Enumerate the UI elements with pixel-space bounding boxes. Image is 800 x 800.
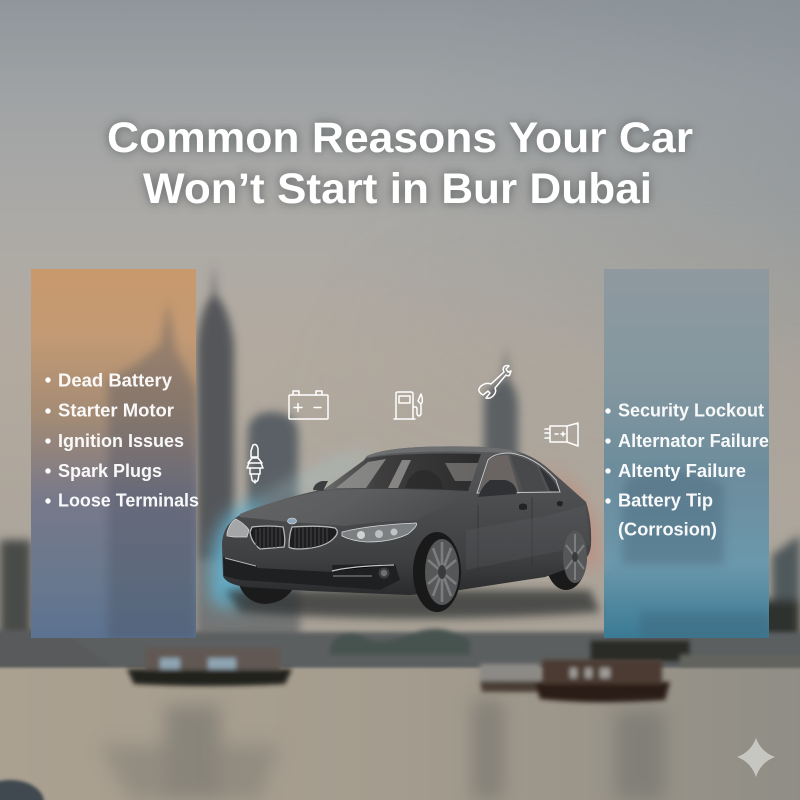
roof: [367, 446, 522, 458]
icon: sparkle watermark: [737, 738, 775, 777]
list: right causes: Security Lockout: [618, 400, 764, 420]
icon: fuel pump: [394, 392, 422, 419]
icon: car battery: [289, 391, 328, 419]
side windows: [478, 455, 520, 494]
panel: right list: [604, 269, 770, 640]
kidney grille: [250, 526, 337, 549]
rear tyre: [545, 524, 587, 590]
list: left causes: Ignition Issues: [58, 430, 184, 451]
list: right causes: Altenty Failure: [618, 460, 746, 481]
front wheel: [413, 532, 461, 612]
ground shadow: [225, 590, 600, 618]
badge: [288, 518, 296, 524]
title: Common Reasons Your Car: [107, 115, 693, 162]
mirror: [478, 480, 517, 497]
list: left causes: Dead Battery: [58, 370, 173, 390]
boats: [127, 648, 670, 702]
far front wheel: [238, 582, 294, 604]
water reflections: [100, 700, 665, 800]
icon: wrench: [479, 366, 511, 398]
list: left causes: Spark Plugs: [58, 460, 162, 481]
title: [107, 115, 693, 213]
list: left causes: [45, 370, 199, 510]
icon: spark plug: [247, 444, 263, 483]
left headlight: [227, 519, 249, 537]
windshield: [323, 454, 481, 491]
list: right causes: Alternator Failure: [618, 430, 769, 451]
title: Common Reasons Your Car: [107, 115, 693, 162]
water: [0, 668, 800, 800]
car: [222, 446, 600, 618]
icon: starter motor: [545, 423, 578, 446]
door handles and seams: [519, 501, 563, 510]
list: right causes: Battery Tip: [618, 490, 713, 510]
title: Won’t Start in Bur Dubai: [143, 166, 652, 213]
right headlight: [342, 523, 417, 542]
list: right causes: (Corrosion): [618, 518, 717, 540]
hood: [240, 489, 478, 526]
body: [222, 446, 591, 595]
list: left causes: Starter Motor: [58, 400, 174, 420]
far shore: [0, 629, 800, 692]
list: left causes: Loose Terminals: [58, 490, 199, 510]
rear wheel: [563, 531, 587, 583]
car glow: [210, 450, 596, 608]
panel: left list: [31, 269, 199, 640]
title: Won’t Start in Bur Dubai: [143, 166, 652, 213]
list: right causes: [605, 400, 769, 540]
skyline: [0, 262, 800, 650]
front lower air intakes: [223, 557, 400, 590]
window trim: [477, 453, 560, 493]
side highlight: [466, 505, 590, 570]
